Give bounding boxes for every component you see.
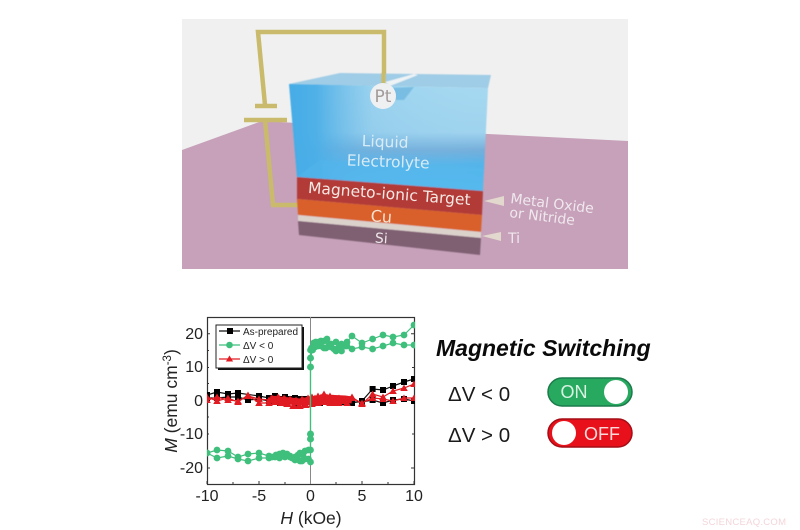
toggle: ON: ON xyxy=(560,382,588,402)
legend: As-prepared xyxy=(243,327,298,338)
y axis tick labels: 0 xyxy=(194,393,203,410)
layer: magneto-ionic target xyxy=(297,177,483,215)
arrow: Ti pointer xyxy=(482,232,501,241)
y axis tick labels: 20 xyxy=(185,326,203,343)
label: Si: Si xyxy=(374,231,388,247)
ground plane xyxy=(182,121,628,269)
circuit wires and battery xyxy=(244,32,384,205)
arrow: metal oxide pointer xyxy=(484,196,504,206)
label: Ti: Ti xyxy=(507,231,520,247)
toggle: OFF xyxy=(548,419,632,447)
legend: ΔV < 0 xyxy=(243,341,274,352)
legend: ΔV > 0 xyxy=(243,355,274,366)
x axis tick labels xyxy=(195,488,423,505)
electrolyte block xyxy=(289,73,491,255)
label: Magneto-ionic Target: Magneto-ionic Target xyxy=(308,179,471,209)
watermark: SCIENCEAQ.COM xyxy=(702,517,786,528)
label: Liquid Electrolyte: Electrolyte xyxy=(346,152,430,172)
y axis tick labels: -10 xyxy=(180,426,203,443)
toggle: OFF: OFF xyxy=(584,424,620,444)
x axis tick labels: -10 xyxy=(195,488,219,505)
series: as-prepared xyxy=(207,379,414,404)
y axis title: ) xyxy=(161,349,181,355)
x axis title: H (kOe) xyxy=(280,508,342,528)
y axis tick labels xyxy=(180,326,203,477)
series: delta V less than 0 xyxy=(207,325,414,462)
x axis tick labels: 10 xyxy=(405,488,423,505)
panel: magnetic switching xyxy=(436,335,651,447)
label: negative voltage: ΔV < 0 xyxy=(448,383,510,406)
toggle: ON xyxy=(548,378,632,406)
panel: 3D electrochemical cell illustration xyxy=(182,19,628,269)
y axis title: M (emu cm xyxy=(161,365,181,453)
chart: M vs H hysteresis loops xyxy=(161,317,423,528)
Pt electrode xyxy=(370,83,396,109)
label: Cu: Cu xyxy=(370,206,393,227)
x axis tick labels: 5 xyxy=(358,488,367,505)
heading: Magnetic Switching xyxy=(436,335,651,361)
layer: Ti xyxy=(298,215,481,238)
y axis tick labels: -20 xyxy=(180,460,203,477)
x axis tick labels: -5 xyxy=(252,488,266,505)
label: Metal Oxide or Nitride: Metal Oxide xyxy=(510,191,595,217)
y axis title: -3 xyxy=(162,355,174,365)
label: Metal Oxide or Nitride: or Nitride xyxy=(509,205,576,229)
y axis tick labels: 10 xyxy=(185,359,203,376)
series: delta V greater than 0 (red, under green vertical) xyxy=(207,384,414,406)
x axis tick labels: 0 xyxy=(306,488,315,505)
legend xyxy=(216,325,304,370)
label: Liquid Electrolyte xyxy=(346,132,430,172)
label: Metal Oxide or Nitride xyxy=(509,191,595,229)
plot frame and axes xyxy=(207,318,414,484)
layer: Si xyxy=(298,221,481,255)
label: positive voltage: ΔV > 0 xyxy=(448,424,510,447)
label: Liquid Electrolyte: Liquid xyxy=(361,132,409,152)
layer: Cu xyxy=(297,199,482,232)
Pt electrode: Pt xyxy=(375,87,392,107)
